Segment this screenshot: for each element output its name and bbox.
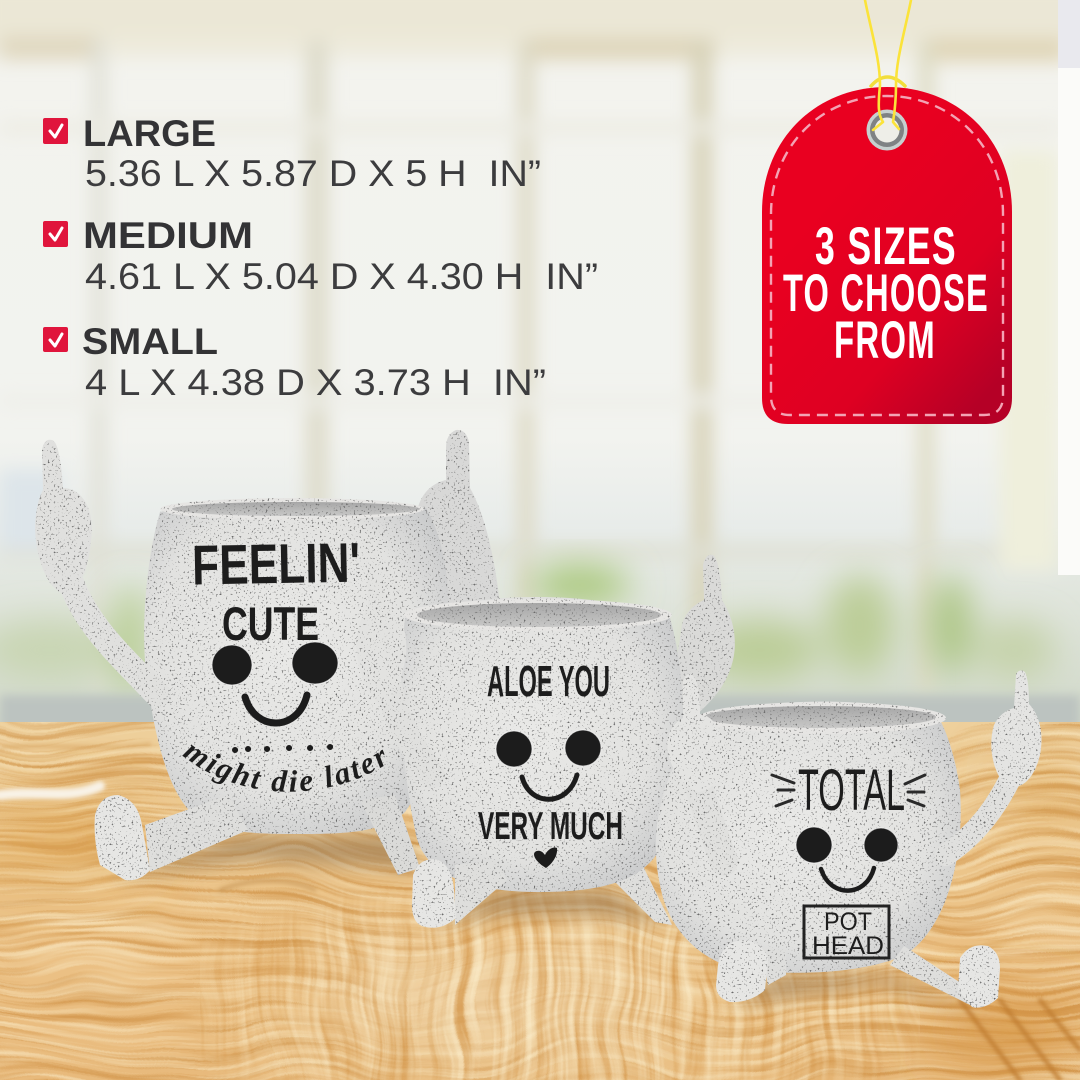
- checkbox: large: [43, 118, 68, 144]
- medium pot body and limbs: [356, 555, 735, 928]
- white strip at right edge: [1058, 0, 1080, 575]
- blurred window background: [0, 0, 1080, 730]
- pot shadows: [110, 835, 980, 1012]
- medium pot face and wording: ALOE YOU: [487, 657, 610, 706]
- heading: medium: MEDIUM: [83, 215, 253, 256]
- tag wording: FROM: [834, 311, 936, 370]
- large pot face and wording: FEELIN': [192, 531, 361, 597]
- large pot body and limbs: [35, 430, 500, 880]
- dimensions: small: 4 L X 4.38 D X 3.73 H IN”: [85, 362, 546, 403]
- medium pot face and wording: [478, 657, 623, 868]
- small pot: [656, 670, 1042, 1008]
- hang tag: [762, 0, 1012, 424]
- string loop behind tag: [871, 77, 905, 86]
- checkbox: medium: [43, 221, 68, 247]
- medium pot: [356, 555, 735, 928]
- string: [865, 0, 911, 130]
- checkbox: small: [43, 327, 68, 352]
- small pot face and wording: TOTAL: [798, 758, 905, 823]
- small pot face and wording: [772, 758, 925, 960]
- wooden table: [0, 722, 1080, 1080]
- dimensions: medium: 4.61 L X 5.04 D X 4.30 H IN”: [85, 256, 598, 297]
- size list: [43, 113, 598, 403]
- small pot body and limbs: [656, 670, 1042, 1008]
- large pot face and wording: CUTE: [222, 597, 319, 650]
- medium pot face and wording: VERY MUCH: [478, 805, 623, 848]
- stitching: [771, 96, 1003, 415]
- small pot face and wording: POT: [824, 908, 872, 936]
- tag wording: 3 SIZES: [815, 217, 957, 276]
- heading: large: LARGE: [83, 113, 216, 154]
- large pot face and wording: might die later: [182, 744, 384, 792]
- heading: small: SMALL: [82, 321, 218, 362]
- dimensions: large: 5.36 L X 5.87 D X 5 H IN”: [85, 153, 541, 194]
- tag wording: [783, 217, 989, 370]
- eyelet: [866, 110, 908, 150]
- large pot: [35, 430, 500, 880]
- small pot face and wording: HEAD: [812, 932, 884, 960]
- tag shape: [762, 87, 1012, 424]
- large pot face and wording: [182, 531, 384, 792]
